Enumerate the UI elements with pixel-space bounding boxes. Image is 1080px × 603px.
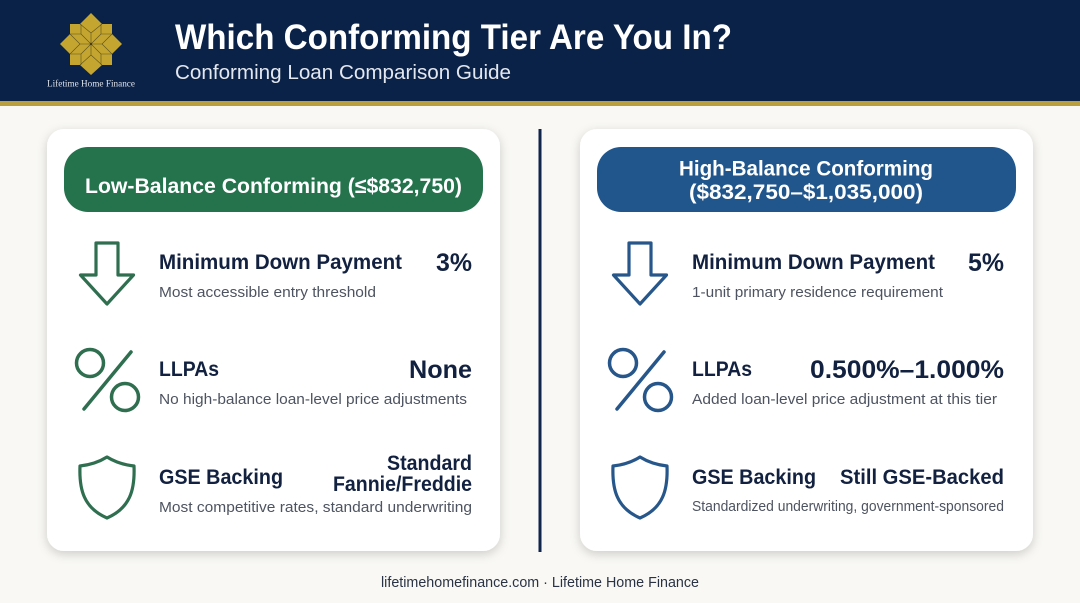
icon: shield (80, 457, 134, 518)
label: Minimum Down Payment (159, 250, 402, 274)
icon: shield (613, 457, 667, 518)
subtitle: Conforming Loan Comparison Guide (175, 61, 511, 84)
row: LLPAs (610, 350, 1004, 410)
row: LLPAs (76, 350, 472, 410)
description: No high-balance loan-level price adjustments (159, 391, 467, 408)
panel heading: low-balance: Low-Balance Conforming (≤$832,750) (85, 174, 462, 198)
row: GSE backing (80, 451, 472, 518)
panel: high-balance conforming (580, 129, 1033, 551)
icon: down arrow (614, 243, 666, 304)
logo (47, 13, 135, 88)
description: Standardized underwriting, government-sponsored (692, 498, 1004, 515)
title: Which Conforming Tier Are You In? (175, 18, 732, 57)
label: GSE Backing (692, 465, 816, 489)
panel heading: high-balance: High-Balance Conforming (679, 156, 933, 180)
value: Standard (387, 451, 472, 475)
label: GSE Backing (159, 465, 283, 489)
center divider (538, 129, 542, 552)
panel: low-balance conforming (47, 129, 500, 551)
label: LLPAs (692, 357, 752, 381)
value: 3% (436, 249, 472, 277)
logo wordmark: Lifetime Home Finance (47, 78, 135, 88)
row: minimum down payment (614, 243, 1004, 304)
panel heading: high-balance: ($832,750–$1,035,000) (689, 180, 923, 204)
panel heading: high-balance (597, 147, 1016, 212)
description: Most accessible entry threshold (159, 284, 376, 301)
icon: down arrow (80, 243, 134, 304)
panel heading: low-balance (64, 147, 483, 212)
label: Minimum Down Payment (692, 250, 935, 274)
icon: percent (76, 350, 138, 410)
description: 1-unit primary residence requirement (692, 284, 944, 301)
footer: lifetimehomefinance.com · Lifetime Home Finance (381, 575, 699, 591)
description: Added loan-level price adjustment at this tier (692, 391, 997, 408)
label: LLPAs (159, 357, 219, 381)
header banner (0, 0, 1080, 106)
description: Most competitive rates, standard underwriting (159, 499, 472, 516)
icon: percent (610, 350, 672, 410)
icon: gold star mark (60, 13, 122, 75)
value: 5% (968, 249, 1004, 277)
row: minimum down payment (80, 243, 472, 304)
value: None (409, 356, 472, 384)
value (333, 451, 472, 496)
value: Fannie/Freddie (333, 472, 472, 496)
row: GSE backing (613, 457, 1004, 518)
value: Still GSE-Backed (840, 465, 1004, 489)
value: 0.500%–1.000% (810, 356, 1004, 384)
